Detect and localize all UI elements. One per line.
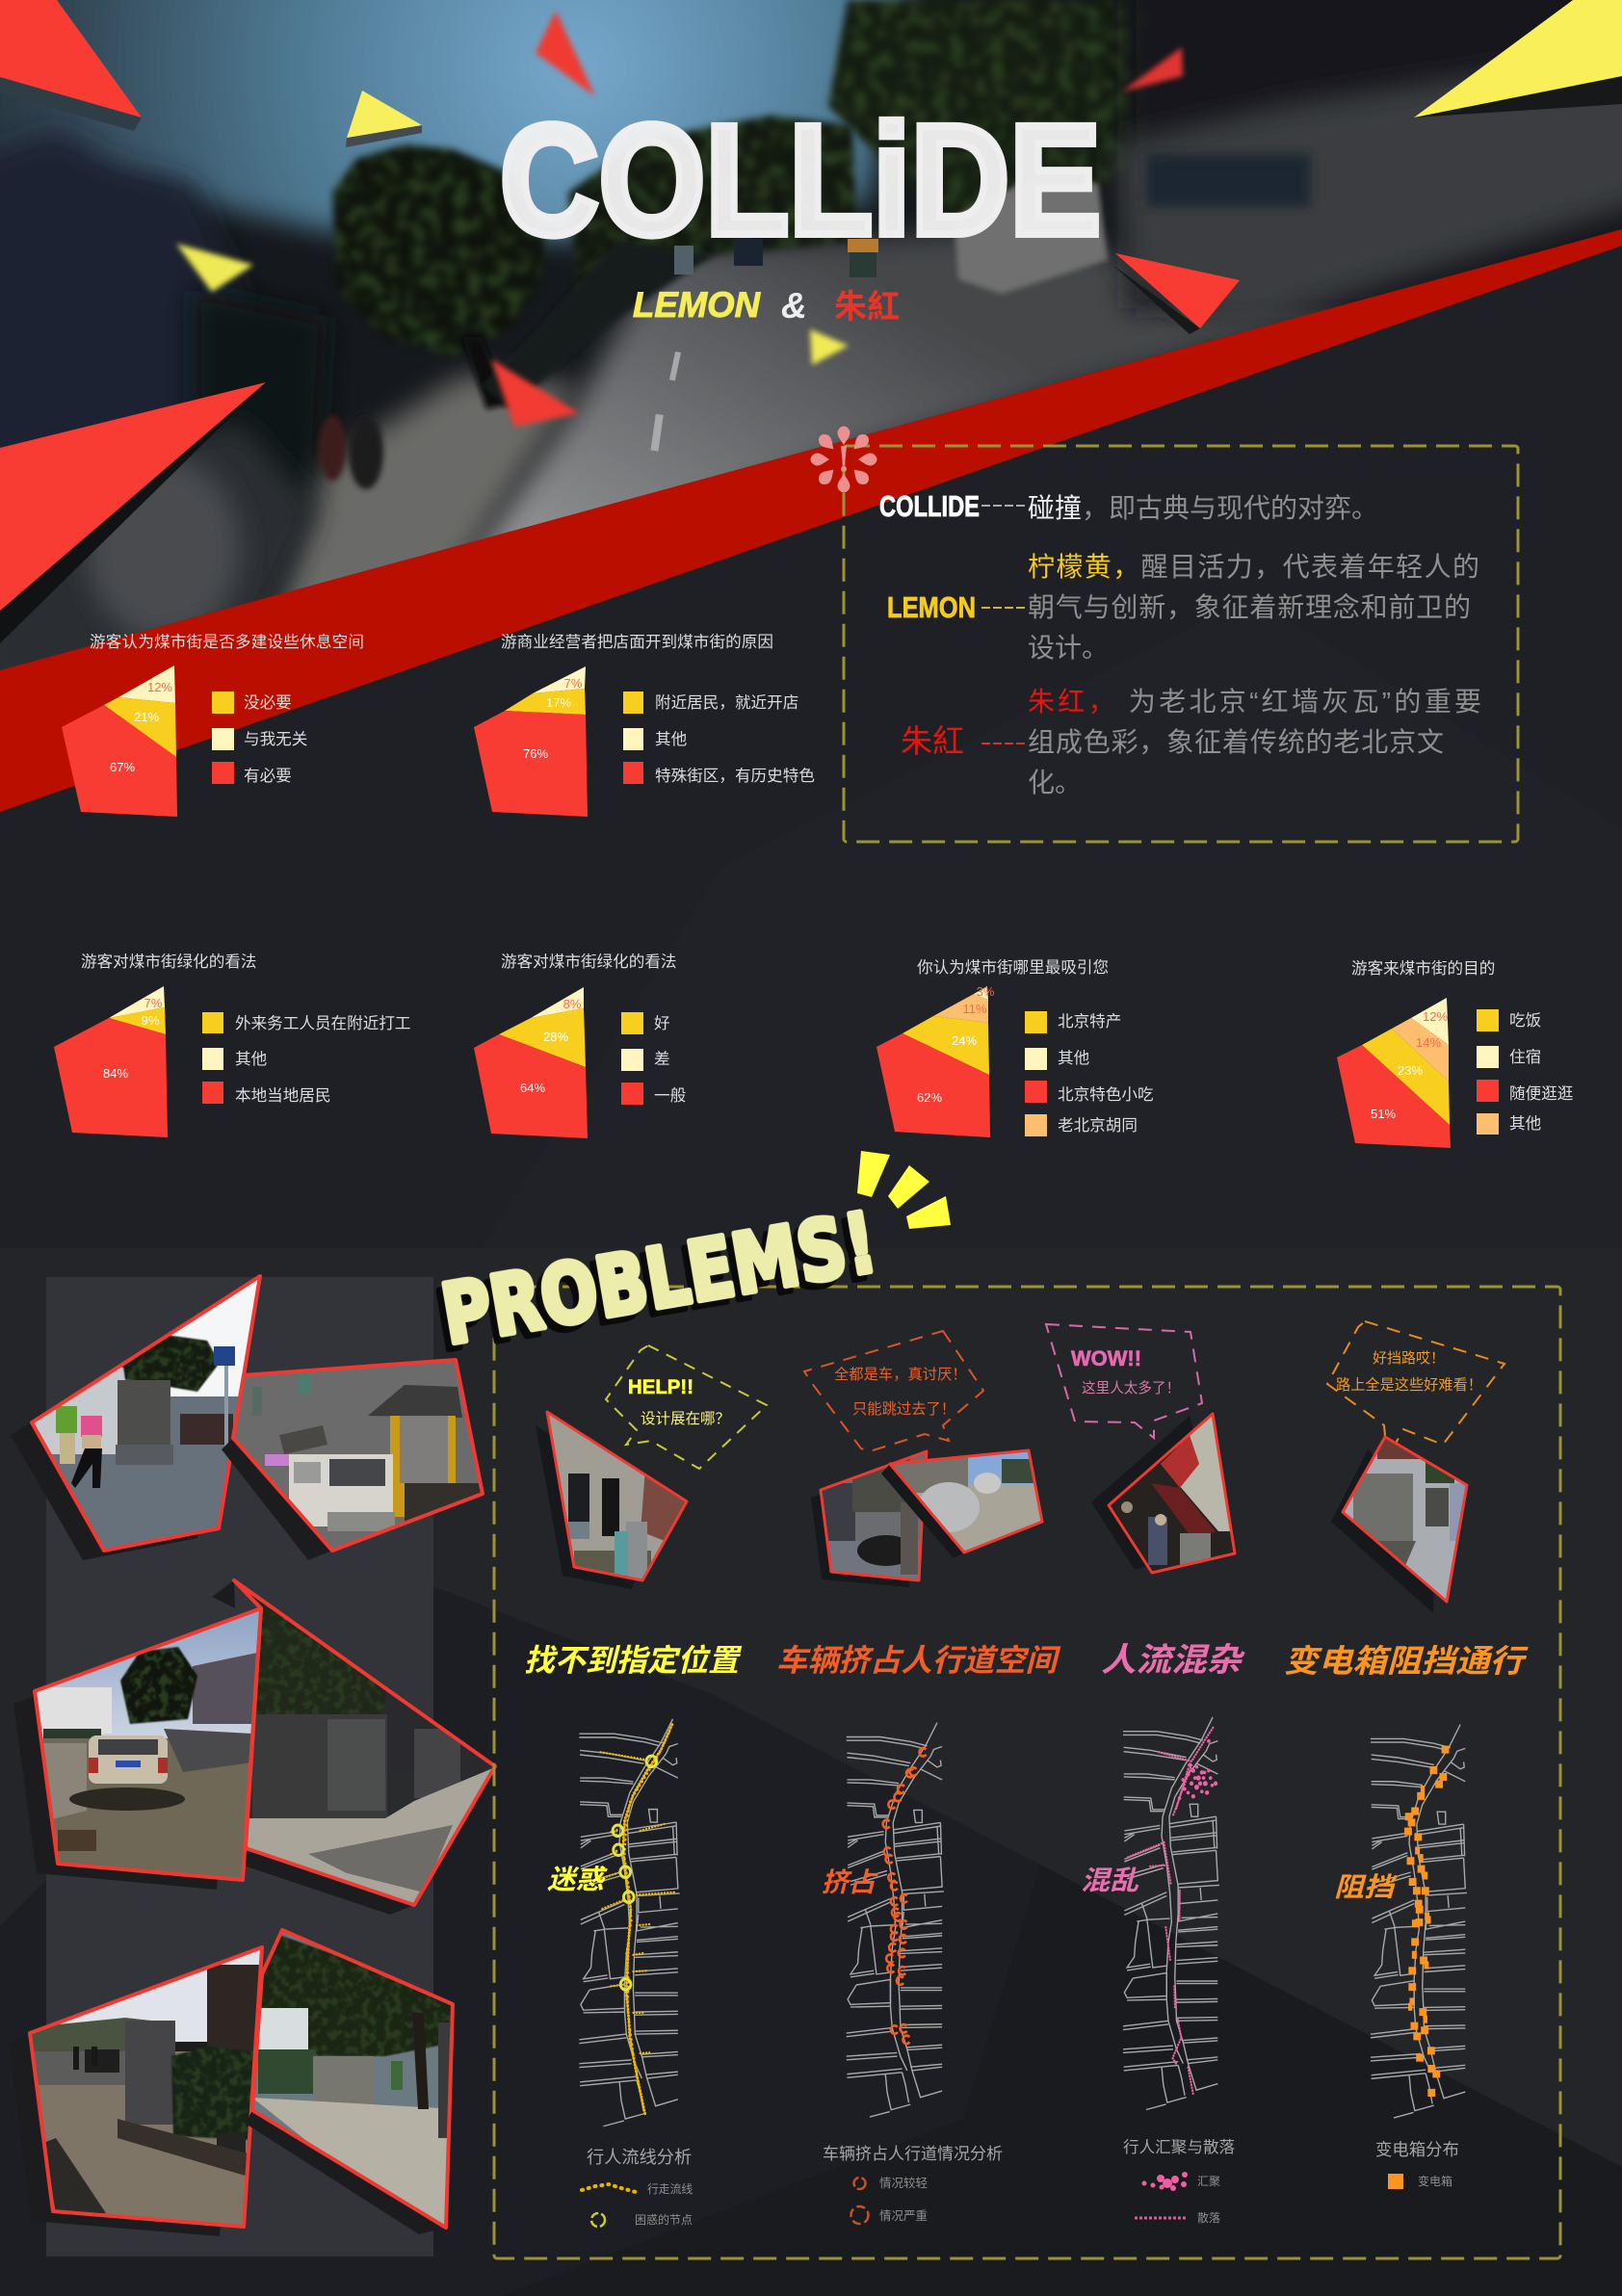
heading: transformer boxes: 变电箱阻挡通行 (1284, 1643, 1529, 1679)
row: lemon: 朝气与创新，象征着新理念和前卫的 (1028, 592, 1471, 622)
map 2: vehicles on sidewalk (822, 1723, 944, 2117)
pie chart 1: 12% (147, 680, 172, 694)
pie chart 6: 住宿 (1509, 1048, 1541, 1066)
pie chart 6: 12% (1423, 1009, 1448, 1024)
pie chart 3: 其他 (235, 1050, 267, 1068)
row: collide (879, 489, 1378, 523)
pie chart 6: 吃饭 (1509, 1011, 1541, 1030)
row: red: 化。 (1028, 768, 1082, 797)
pie chart 3: 游客对煤市街绿化的看法 (81, 952, 257, 971)
pie chart 5: 其他 (1058, 1049, 1089, 1067)
pie chart 6 (1337, 959, 1573, 1148)
pie chart 1: 与我无关 (244, 730, 307, 748)
pie chart 4 (474, 952, 686, 1138)
legend: map 3 (1123, 2138, 1236, 2225)
pie chart 5: 北京特产 (1058, 1012, 1121, 1031)
pie chart 3: 本地当地居民 (235, 1086, 331, 1105)
legend: map 1: 行人流线分析 (587, 2148, 692, 2167)
heading: crowd: 人流混杂 (1101, 1642, 1245, 1679)
hero street photo (0, 0, 1622, 693)
title COLLIDE: COLLiDE (500, 91, 1101, 268)
pie chart 3: 84% (103, 1066, 128, 1081)
pie chart 4: 一般 (654, 1086, 686, 1105)
problem 3: speech bubble crowd: 这里人太多了！ (1082, 1380, 1180, 1396)
problem 3: photo (1091, 1411, 1243, 1579)
map label: 阻挡 (1334, 1872, 1398, 1902)
row: collide: 碰撞，即古典与现代的对弈。 (1028, 493, 1378, 523)
left photo panel (9, 1271, 501, 2257)
pie chart 2: 附近居民，就近开店 (655, 693, 798, 712)
blurred red triangle centre (491, 359, 579, 427)
problem 2: speech bubble cars: 全都是车，真讨厌！ (834, 1366, 967, 1383)
legend: map 3: 行人汇聚与散落 (1123, 2138, 1236, 2156)
pie chart 6: 随便逛逛 (1509, 1084, 1573, 1103)
map label: 挤占 (822, 1867, 878, 1897)
map label: 混乱 (1081, 1866, 1139, 1895)
pie chart 5 (876, 958, 1154, 1137)
pie chart 5: 3% (977, 984, 995, 999)
legend: map 2: 车辆挤占人行道情况分析 (823, 2145, 1003, 2163)
photo D (212, 1578, 501, 1915)
subtitle: 朱紅 (834, 289, 900, 326)
subtitle (633, 285, 900, 326)
box markers (1404, 1750, 1449, 2093)
problem 4: photo (1331, 1435, 1469, 1613)
row: lemon: LEMON (887, 590, 976, 624)
problem 1: speech bubble help: HELP!! (628, 1376, 693, 1398)
scatter dots (1128, 1727, 1214, 2095)
pie chart 2 (474, 633, 815, 817)
pie chart 6: 51% (1371, 1107, 1396, 1121)
pie chart 1: 游客认为煤市街是否多建设些休息空间 (90, 633, 364, 651)
pie chart 5: 24% (952, 1033, 977, 1048)
row: red: 朱紅 (901, 723, 964, 759)
burst rays (857, 1151, 951, 1229)
legend: map 2: 情况严重 (879, 2208, 928, 2223)
problem 3: speech bubble crowd (1046, 1324, 1202, 1438)
legend: map 1: 困惑的节点 (635, 2212, 693, 2227)
pie chart 3: 9% (142, 1013, 160, 1028)
vehicle markers (883, 1748, 927, 2044)
pie chart 2: 其他 (655, 730, 687, 748)
pie chart 5: 11% (962, 1002, 987, 1016)
pie chart 5: 你认为煤市街哪里最吸引您 (917, 958, 1109, 977)
blurred yellow triangle left (176, 244, 253, 292)
problem 2: speech bubble cars: 只能跳过去了！ (852, 1401, 955, 1418)
photo F (246, 1926, 458, 2234)
legend: map 4: 变电箱 (1418, 2174, 1452, 2188)
pie chart 2: 17% (546, 695, 571, 710)
legend: map 3: 汇聚 (1197, 2175, 1220, 2188)
confusion rings (613, 1756, 657, 1990)
pie chart 6: 游客来煤市街的目的 (1351, 959, 1495, 978)
pie chart 4: 差 (654, 1050, 670, 1068)
map 3: pedestrian gathering (1081, 1717, 1219, 2109)
heading: cannot find location: 找不到指定位置 (524, 1643, 743, 1678)
pie chart 3: 7% (144, 996, 163, 1010)
problem 3: speech bubble crowd: WOW!! (1071, 1346, 1141, 1370)
legend: map 3: 散落 (1197, 2210, 1220, 2225)
legend: map 1: 行走流线 (647, 2182, 693, 2196)
problem 4: speech bubble box (1327, 1321, 1504, 1459)
row: red: 朱红， 为老北京“红墙灰瓦”的重要 (1028, 687, 1481, 717)
photo E (9, 1945, 266, 2236)
problem 2: speech bubble cars (804, 1331, 983, 1451)
blurred red triangle top (536, 11, 595, 96)
flow dots (601, 1725, 674, 2115)
problem 1: speech bubble help (606, 1345, 767, 1469)
problems dashed frame (494, 1287, 1560, 2258)
pie chart 1 (62, 633, 364, 817)
legend: map 4 (1375, 2140, 1459, 2189)
pie chart 3 (54, 952, 411, 1137)
legend: map 2 (823, 2145, 1003, 2224)
pie chart 2: 76% (523, 746, 548, 761)
yellow triangle small (346, 91, 422, 147)
pie chart 5: 62% (917, 1090, 942, 1105)
blurred red triangle upper right (1122, 47, 1183, 91)
pie chart 1: 有必要 (244, 767, 292, 785)
icon: exclamation flower (811, 426, 876, 493)
pie chart 5: 北京特色小吃 (1058, 1085, 1154, 1104)
photo A (11, 1271, 265, 1560)
subtitle: & (781, 286, 807, 326)
pie chart 1: 没必要 (244, 693, 292, 712)
map label: 迷惑 (547, 1865, 608, 1894)
pie chart 3: 外来务工人员在附近打工 (235, 1014, 411, 1032)
heading: vehicles: 车辆挤占人行道空间 (776, 1643, 1061, 1678)
problem 2: photos (811, 1445, 1045, 1587)
pie chart 2: 游商业经营者把店面开到煤市街的原因 (501, 633, 773, 651)
large red triangle left (0, 382, 266, 643)
pie chart 6: 23% (1398, 1063, 1423, 1078)
definition box (811, 426, 1518, 842)
pie chart 4: 64% (520, 1081, 545, 1095)
row: lemon: 柠檬黄，醒目活力，代表着年轻人的 (1028, 552, 1479, 582)
problem 4: speech bubble box: 好挡路哎！ (1373, 1350, 1445, 1367)
pie chart 5: 老北京胡同 (1058, 1116, 1138, 1135)
pie chart 2: 特殊街区，有历史特色 (655, 767, 815, 785)
yellow triangle top right (1414, 0, 1622, 117)
PROBLEMS heading: PROBLEMS! (435, 1194, 883, 1364)
pie chart 4: 游客对煤市街绿化的看法 (501, 952, 677, 971)
pie chart 2: 7% (564, 676, 583, 691)
subtitle: LEMON (633, 285, 761, 325)
row: red: 组成色彩，象征着传统的老北京文 (1028, 727, 1444, 757)
photo B (222, 1358, 486, 1560)
problem 1: speech bubble help: 设计展在哪？ (641, 1410, 730, 1427)
row: red (901, 687, 1481, 797)
row: lemon: 设计。 (1028, 633, 1109, 663)
row: collide: COLLIDE (879, 489, 980, 523)
map 1: pedestrian flow (547, 1719, 680, 2126)
pie chart 4: 8% (563, 997, 582, 1011)
pie chart 1: 67% (110, 760, 135, 774)
map 4: transformer box distribution (1334, 1725, 1467, 2118)
legend: map 4: 变电箱分布 (1375, 2140, 1459, 2159)
pie chart 4: 28% (543, 1030, 568, 1044)
red diagonal band (0, 229, 1622, 812)
problem 1: photo (536, 1406, 693, 1589)
pie chart 6: 14% (1416, 1035, 1441, 1050)
red triangle with shadow right (1112, 253, 1240, 334)
blurred yellow triangle road (810, 329, 849, 365)
photo C (13, 1604, 265, 1890)
legend: map 1 (582, 2148, 693, 2227)
pie chart 1: 21% (134, 710, 159, 724)
pie chart 4: 好 (654, 1014, 670, 1032)
red triangle top left (0, 0, 142, 131)
pie chart 6: 其他 (1509, 1114, 1541, 1133)
problem 4: speech bubble box: 路上全是这些好难看！ (1336, 1376, 1482, 1394)
row: lemon (887, 552, 1479, 663)
gathering cluster (1178, 1739, 1217, 1800)
legend: map 2: 情况较轻 (879, 2176, 928, 2190)
